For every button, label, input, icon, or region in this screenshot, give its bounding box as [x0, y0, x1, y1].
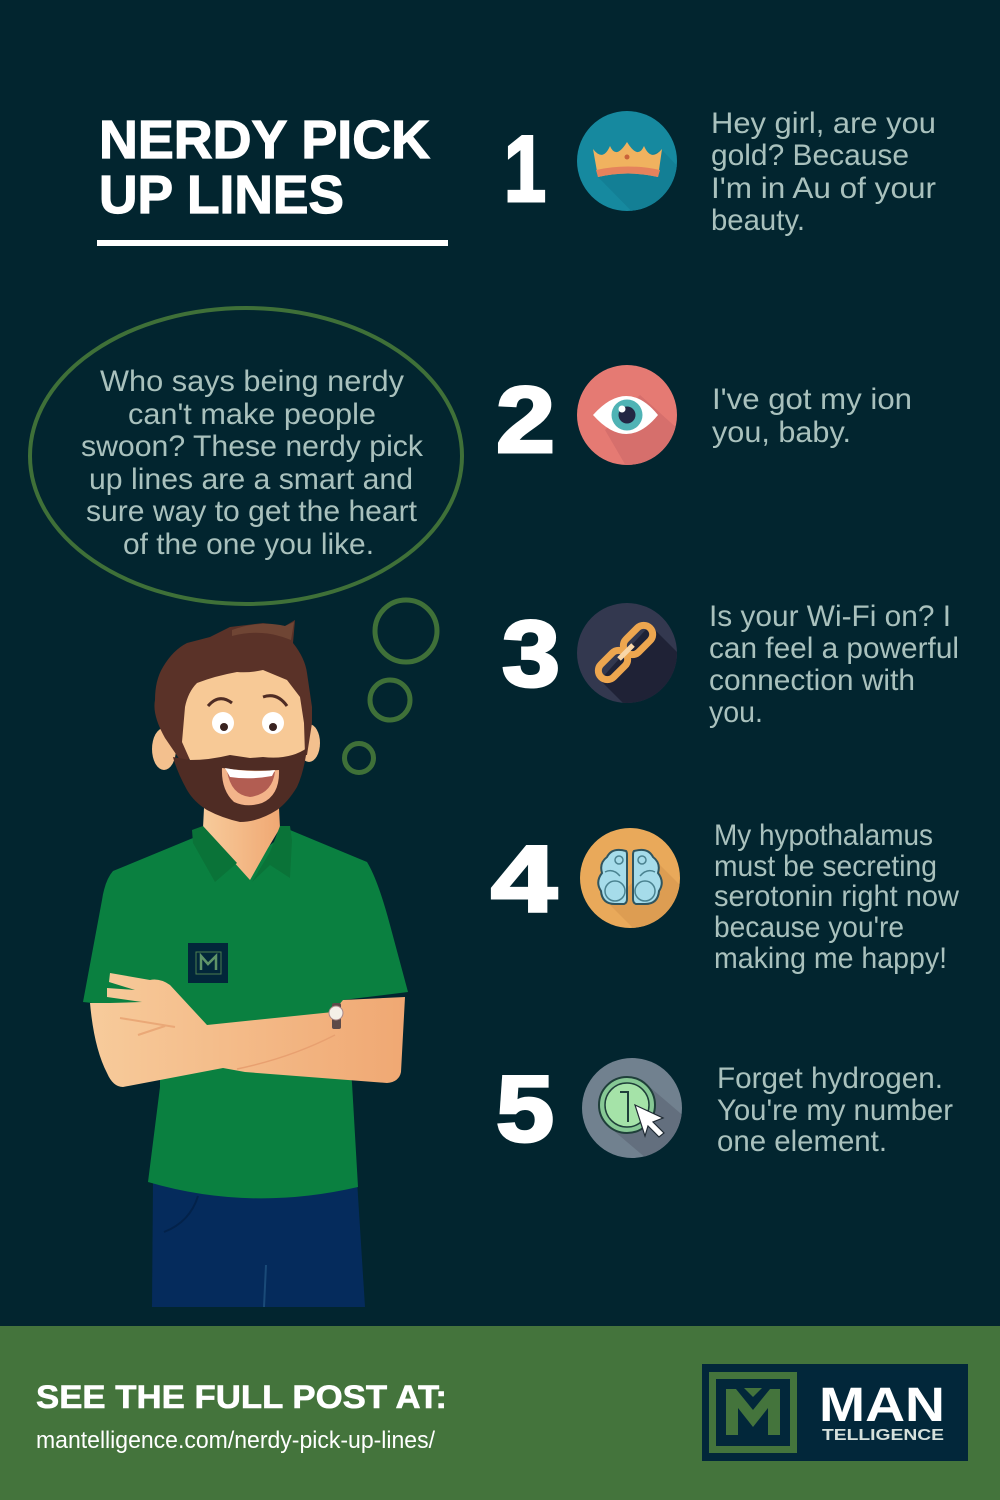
text: Is your Wi-Fi on? I — [709, 600, 951, 633]
line 2 — [498, 365, 910, 465]
crossed arms — [90, 973, 405, 1087]
text: one element. — [717, 1125, 887, 1158]
neck — [203, 808, 280, 880]
character: bearded man in green shirt — [83, 620, 408, 1307]
text: connection with — [709, 664, 915, 697]
footer url: mantelligence.com/nerdy-pick-up-lines/ — [36, 1427, 435, 1454]
shirt logo badge — [188, 943, 228, 983]
collar — [192, 826, 292, 882]
text: can feel a powerful — [709, 632, 959, 665]
text: making me happy! — [714, 942, 947, 975]
footer call to action: SEE THE FULL POST AT: — [36, 1379, 447, 1415]
logo: TELLIGENCE — [822, 1427, 944, 1444]
number 1: 1 — [504, 116, 546, 221]
speech bubble: intro text — [30, 308, 462, 604]
beard — [173, 748, 307, 822]
speech bubble: intro text: sure way to get the heart — [86, 495, 417, 528]
number 4: 4 — [491, 826, 557, 931]
trousers — [152, 1180, 365, 1307]
mouth — [222, 768, 279, 805]
eyebrows — [208, 696, 287, 706]
shirt — [83, 830, 408, 1198]
ears — [152, 728, 176, 770]
eyes — [212, 712, 234, 734]
text: Forget hydrogen. — [717, 1062, 943, 1095]
speech bubble: intro text: up lines are a smart and — [89, 463, 413, 496]
text — [709, 600, 959, 729]
line 1 — [504, 107, 936, 237]
text: because you're — [714, 911, 904, 944]
line 5 — [497, 1058, 953, 1158]
text: I'm in Au of your — [711, 172, 936, 205]
line 3 — [502, 600, 959, 729]
icon: brain — [580, 828, 680, 928]
speech bubble: intro text: Who says being nerdy — [100, 365, 404, 398]
text: You're my number — [717, 1094, 953, 1127]
title — [97, 110, 448, 246]
speech bubble: intro text: of the one you like. — [123, 528, 374, 561]
logo — [702, 1364, 968, 1461]
text: I've got my ion — [712, 383, 912, 416]
text: you, baby. — [712, 416, 851, 449]
text: My hypothalamus — [714, 819, 933, 852]
thought bubbles — [344, 600, 437, 772]
icon: chain link — [577, 603, 677, 703]
face — [182, 670, 305, 775]
logo: MAN — [819, 1379, 945, 1432]
text: gold? Because — [711, 139, 909, 172]
speech bubble: intro text: swoon? These nerdy pick — [81, 430, 423, 463]
number 5: 5 — [496, 1056, 554, 1161]
number 3: 3 — [502, 601, 560, 706]
number 2: 2 — [496, 367, 555, 472]
text: Hey girl, are you — [711, 107, 936, 140]
text — [712, 383, 912, 449]
text: must be secreting — [714, 850, 937, 883]
hair — [154, 620, 312, 760]
text: beauty. — [711, 204, 805, 237]
speech bubble: intro text: can't make people — [128, 398, 376, 431]
icon: eye — [577, 365, 677, 465]
title: UP LINES — [99, 165, 344, 225]
icon: coin and cursor — [582, 1058, 682, 1158]
wristwatch — [329, 1003, 343, 1029]
line 4 — [491, 819, 960, 975]
icon: crown — [577, 111, 677, 211]
title: NERDY PICK — [99, 110, 430, 170]
text — [717, 1062, 953, 1158]
head — [152, 620, 320, 822]
text — [711, 107, 936, 237]
footer band — [0, 1326, 1000, 1500]
text: serotonin right now — [714, 880, 960, 913]
text — [714, 819, 960, 975]
text: you. — [709, 696, 763, 729]
